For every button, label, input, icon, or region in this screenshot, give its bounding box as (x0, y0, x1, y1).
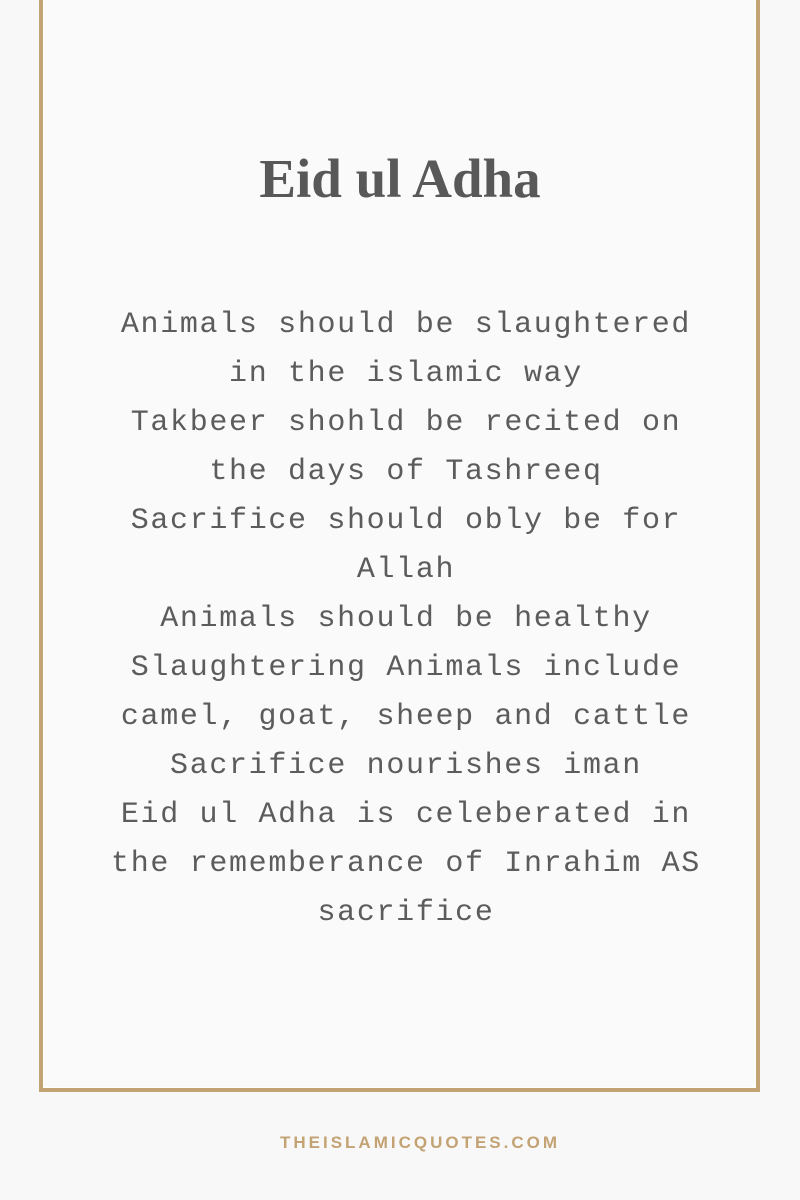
title: Eid ul Adha (259, 148, 541, 209)
footer: website: THEISLAMICQUOTES.COM (280, 1133, 560, 1152)
text block: Eid ul Adha points: Eid ul Adha is celeberated in (121, 798, 691, 832)
text block: Eid ul Adha points: Sacrifice nourishes iman (170, 749, 642, 783)
text block: Eid ul Adha points: Animals should be slaughtered (121, 308, 691, 342)
text block: Eid ul Adha points: Sacrifice should obly be for (131, 504, 681, 538)
text block: Eid ul Adha points: Slaughtering Animals include (131, 651, 681, 685)
text block: Eid ul Adha points: camel, goat, sheep and cattle (121, 700, 691, 734)
text block: Eid ul Adha points (111, 308, 701, 930)
text block: Eid ul Adha points: Animals should be healthy (160, 602, 652, 636)
text block: Eid ul Adha points: Takbeer shohld be recited on (131, 406, 681, 440)
text block: Eid ul Adha points: Allah (357, 553, 455, 587)
text block: Eid ul Adha points: in the islamic way (229, 357, 583, 391)
text block: Eid ul Adha points: sacrifice (318, 896, 494, 930)
text block: Eid ul Adha points: the rememberance of Inrahim AS (111, 847, 701, 881)
text block: Eid ul Adha points: the days of Tashreeq (209, 455, 603, 489)
